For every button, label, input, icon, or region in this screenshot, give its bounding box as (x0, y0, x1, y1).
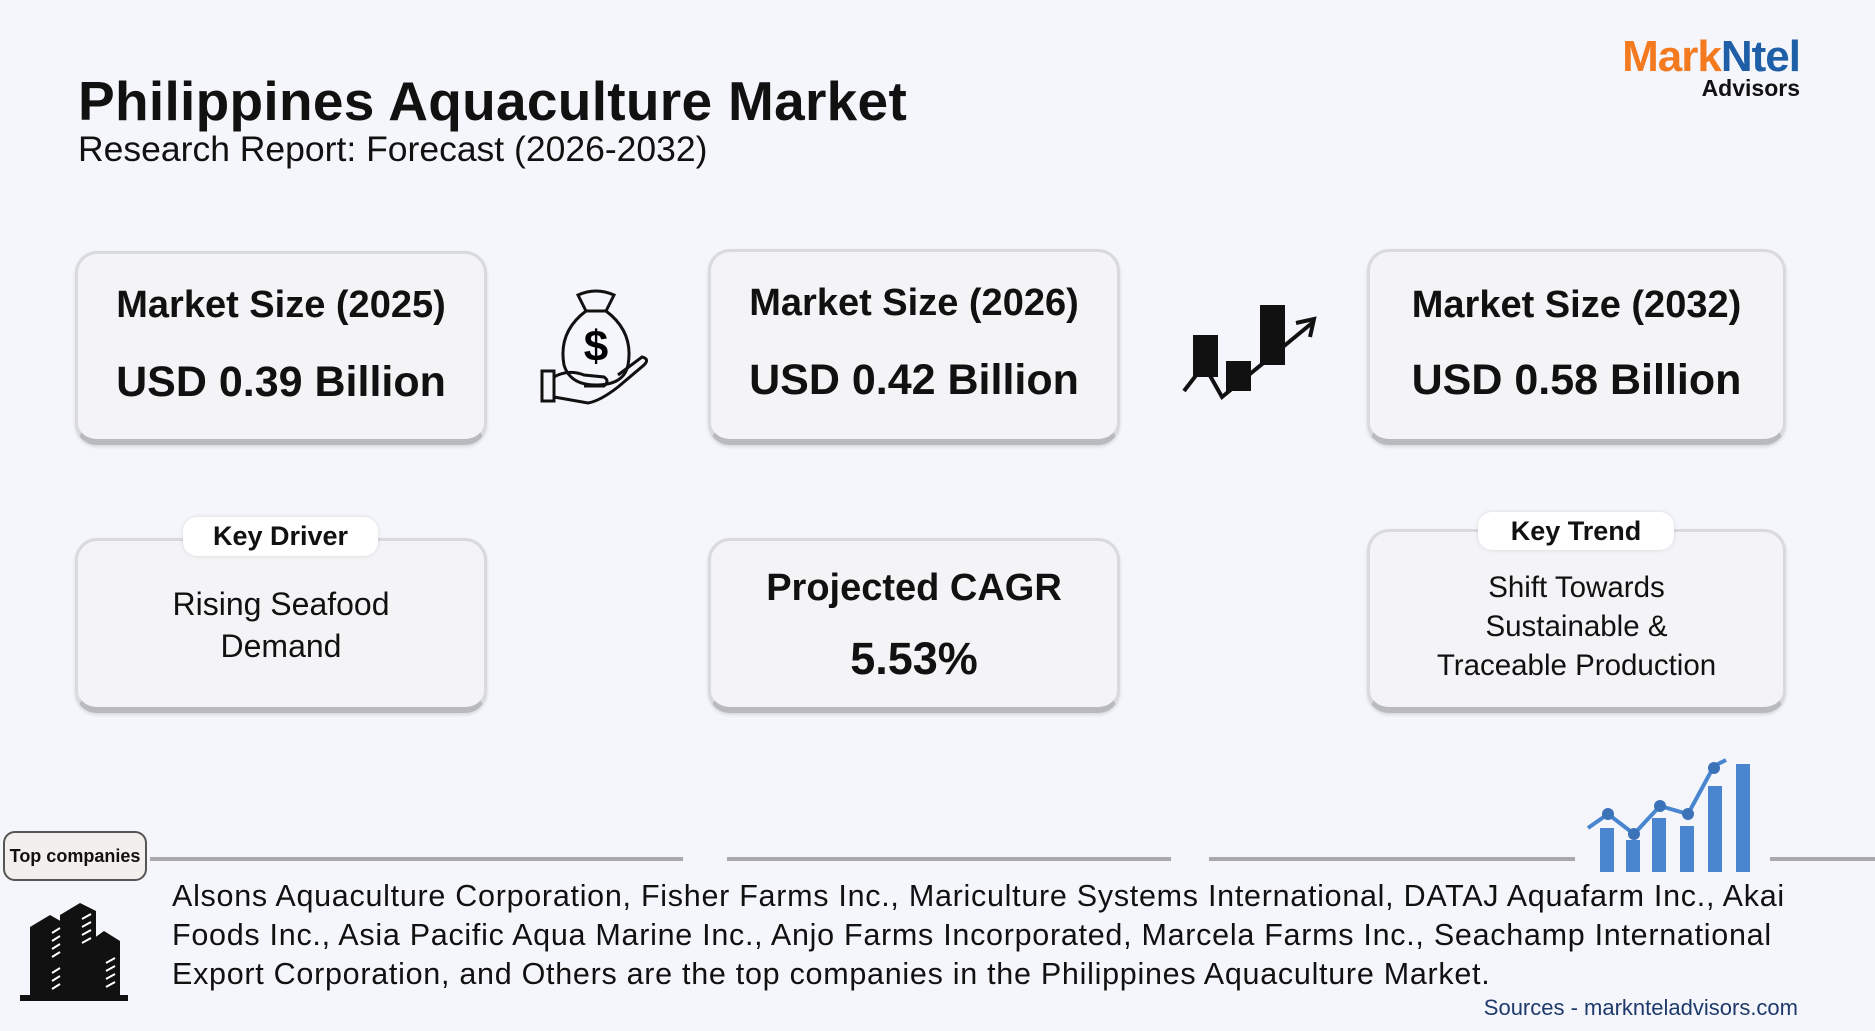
panel: key driver (75, 538, 487, 713)
panel: key trend: Sustainable & (1485, 610, 1668, 643)
panel: market size 2032 (1367, 249, 1786, 445)
icon: blue bar chart (1586, 758, 1750, 872)
panel: key trend (1367, 529, 1786, 713)
icon: trend up (1182, 305, 1317, 400)
label: top companies (3, 831, 147, 881)
subtitle: Research Report: Forecast (2026-2032) (78, 129, 707, 169)
label: key driver: Key Driver (213, 521, 348, 551)
panel: CAGR: 5.53% (850, 633, 978, 684)
logo: MarkNtel (1622, 32, 1800, 81)
label: key trend: Key Trend (1511, 516, 1641, 546)
panel: market size 2025 (75, 251, 487, 445)
sources: Sources - marknteladvisors.com (1484, 995, 1798, 1020)
panel: market size 2026: USD 0.42 Billion (749, 356, 1079, 404)
text: top companies: Foods Inc., Asia Pacific Aqua Marine Inc., Anjo Farms Incorporated, Marcela Farms Inc., Seachamp International (172, 918, 1772, 952)
panel: market size 2032: Market Size (2032) (1412, 284, 1741, 326)
icon: buildings (20, 903, 128, 1001)
panel: key driver: Demand (221, 628, 341, 664)
panel: key trend: Shift Towards (1488, 571, 1665, 604)
panel: market size 2026: Market Size (2026) (749, 282, 1079, 324)
text: top companies (172, 879, 1785, 991)
panel: market size 2032: USD 0.58 Billion (1412, 356, 1741, 404)
panel: CAGR (708, 538, 1120, 713)
label: key driver (183, 517, 378, 556)
title: Philippines Aquaculture Market (78, 70, 907, 132)
panel: key driver: Rising Seafood (172, 586, 390, 622)
text: top companies: Alsons Aquaculture Corporation, Fisher Farms Inc., Mariculture Systems International, DATAJ Aquafarm Inc., Akai (172, 879, 1785, 913)
icon: money bag in hand: $ (584, 322, 608, 371)
label: top companies: Top companies (10, 846, 140, 866)
panel: market size 2026 (708, 249, 1120, 445)
panel: key trend: Traceable Production (1437, 649, 1716, 682)
icon: money bag in hand (540, 290, 648, 404)
logo: Advisors (1702, 75, 1800, 101)
label: key trend (1478, 512, 1674, 550)
panel: CAGR: Projected CAGR (766, 567, 1062, 609)
panel: market size 2025: Market Size (2025) (116, 284, 446, 326)
panel: market size 2025: USD 0.39 Billion (116, 358, 446, 406)
text: top companies: Export Corporation, and Others are the top companies in the Philippines Aquaculture Market. (172, 957, 1490, 991)
